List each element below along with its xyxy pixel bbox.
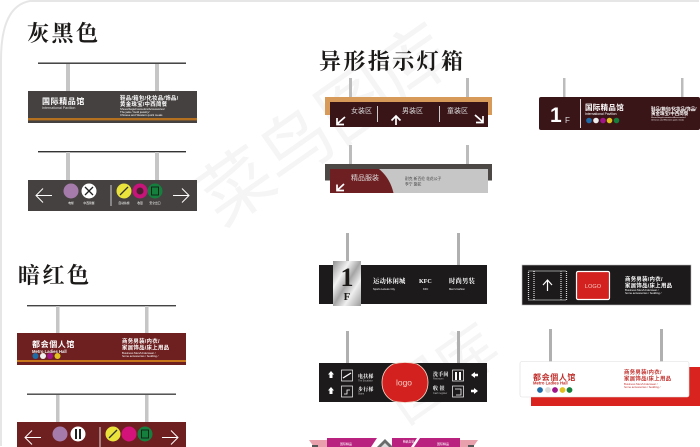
sign: grey and red boutique sign xyxy=(325,145,492,193)
sign: black with silver 1F tab xyxy=(319,233,487,306)
sign: orange-backed department sign: 童装区 xyxy=(447,106,468,115)
sign: black facilities with red logo: Cash register xyxy=(433,392,447,395)
sign: black with silver 1F tab: KFC xyxy=(423,287,428,291)
sign: black with silver 1F tab: 运动休闲城 xyxy=(373,276,406,285)
sign: white and red ladies hall: 家居饰品/床上用品 xyxy=(624,374,672,382)
sign: dark red ladies hall: 商务男装/内衣/ xyxy=(122,337,160,345)
sign: 1F international pavilion: 黄金珠宝/中西简餐 xyxy=(651,110,689,117)
sign: black facilities with red logo: logo xyxy=(396,378,412,388)
sign: grey-black directions: 安全出口 xyxy=(149,201,161,205)
sign: white and red ladies hall: Business Men/Underwear / xyxy=(624,382,658,386)
sign: black with up arrow and red logo xyxy=(522,265,691,305)
sign: dark red directions xyxy=(17,394,186,447)
sign: grey and red boutique sign: 耐克 新百伦 花花公子 xyxy=(405,176,441,181)
sign: 1F international pavilion: International Pavilion xyxy=(585,112,617,116)
sign: black with up arrow and red logo: 商务男装/内衣/ xyxy=(625,275,663,283)
sign: white and red ladies hall: Metro Ladies Hall xyxy=(533,380,568,386)
sign: pink partial sign xyxy=(309,438,478,447)
sign: black facilities with red logo: The Escalator xyxy=(358,380,373,382)
sign: dark red ladies hall: Business Men/Underwear / xyxy=(122,351,156,355)
sign: grey-black pavilion: 国际精品馆 xyxy=(42,96,85,106)
sign: black facilities with red logo: 洗手间 xyxy=(433,371,449,378)
sign: pink partial sign: 国际精品 xyxy=(340,441,352,446)
sign: grey and red boutique sign: 精品服装 xyxy=(351,173,379,182)
sign: black with up arrow and red logo: LOGO xyxy=(585,284,602,290)
sign: black with silver 1F tab: Men's fashion xyxy=(449,287,465,291)
sign: grey and red boutique sign: 李宁 骆驼 xyxy=(405,182,421,186)
sign: dark red ladies hall xyxy=(17,305,186,365)
sign: black with up arrow and red logo: 家居饰品/床上用品 xyxy=(625,282,673,290)
sign: dark red ladies hall: Metro Ladies Hall xyxy=(32,349,67,354)
sign: grey-black pavilion: Shoes/bags/cosmetics/Accessories/ xyxy=(120,107,165,111)
sign: dark red ladies hall: 家居饰品/床上用品 xyxy=(122,344,170,352)
sign: white and red ladies hall: home accessories / bedding / xyxy=(624,385,661,389)
sign: pink partial sign: 国际精品 xyxy=(437,441,449,446)
heading: grey-black: 灰黑色 xyxy=(27,21,101,46)
sign: black with up arrow and red logo: home accessories / bedding / xyxy=(625,291,662,295)
sign: grey-black pavilion xyxy=(28,62,197,123)
sign: grey-black directions: 收银 xyxy=(137,201,143,205)
watermark: 图库 xyxy=(374,312,511,436)
sign: black with silver 1F tab: 1 xyxy=(340,263,354,292)
sign: grey-black directions: 自动扶梯 xyxy=(118,201,130,205)
sign: 1F international pavilion: Chinese and Western quick meals xyxy=(651,118,685,122)
sign: white and red ladies hall xyxy=(520,329,700,406)
sign: pink partial sign: 精品女装 xyxy=(403,440,414,444)
sign: black with up arrow and red logo: Business Men/Underwear / xyxy=(625,288,659,292)
sign: 1F international pavilion: 鞋品/箱包/化妆品/饰品/ xyxy=(651,106,697,112)
sign: white and red ladies hall: 商务男装/内衣/ xyxy=(624,368,662,376)
sign: black with silver 1F tab: 时尚男装 xyxy=(449,276,475,285)
sign: black facilities with red logo: 收 银 xyxy=(433,385,445,392)
sign: 1F international pavilion: 国际精品馆 xyxy=(585,102,624,112)
sign: black facilities with red logo: 电扶梯 xyxy=(358,373,374,380)
sign: orange-backed department sign: 女装区 xyxy=(351,106,372,115)
sign: dark red ladies hall: home accessories / bedding / xyxy=(122,354,159,358)
sign: orange-backed department sign xyxy=(325,78,492,127)
sign: black with silver 1F tab: KFC xyxy=(419,279,432,285)
sign: orange-backed department sign: 男装区 xyxy=(402,106,423,115)
sign: dark red ladies hall: 都会個人馆 xyxy=(32,339,75,349)
sign: grey-black directions: 电梯 xyxy=(68,201,74,205)
sign: grey-black directions: 中西简餐 xyxy=(83,201,95,205)
watermark: 菜鸟图库 xyxy=(185,10,467,241)
heading: special-shaped lightbox: 异形指示灯箱 xyxy=(319,49,465,74)
heading: dark red: 暗红色 xyxy=(18,263,92,288)
sign: 1F international pavilion: Shoes/bags/cosmetics/Accessories/ xyxy=(651,116,686,119)
sign: grey-black pavilion: International Pavilion xyxy=(42,106,75,110)
sign: 1F international pavilion: F xyxy=(565,116,570,125)
watermark xyxy=(185,10,511,436)
sign: 1F international pavilion xyxy=(539,78,700,130)
sign: 1F international pavilion: 1 xyxy=(550,104,562,127)
sign: black with silver 1F tab: F xyxy=(344,291,351,303)
sign: black facilities with red logo: Stairs xyxy=(358,392,365,396)
sign: grey-black directions xyxy=(28,151,197,211)
sign: white and red ladies hall: 都会個人馆 xyxy=(533,372,576,382)
sign: grey-black pavilion: Chinese and Western quick meals xyxy=(120,113,163,117)
sign: grey-black pavilion: 黄金珠宝/中西简餐 xyxy=(120,100,168,108)
sign: black with silver 1F tab: Sports Leisure City xyxy=(373,287,396,291)
sign: grey-black pavilion: The jade / Gold jewelry/ xyxy=(120,110,150,114)
sign: black facilities with red logo: 步行梯 xyxy=(358,386,374,393)
sign: grey-black pavilion: 鞋品/箱包/化妆品/饰品/ xyxy=(120,94,179,102)
sign: black facilities with red logo xyxy=(319,331,487,402)
sign: black facilities with red logo: Restroom xyxy=(433,378,443,380)
